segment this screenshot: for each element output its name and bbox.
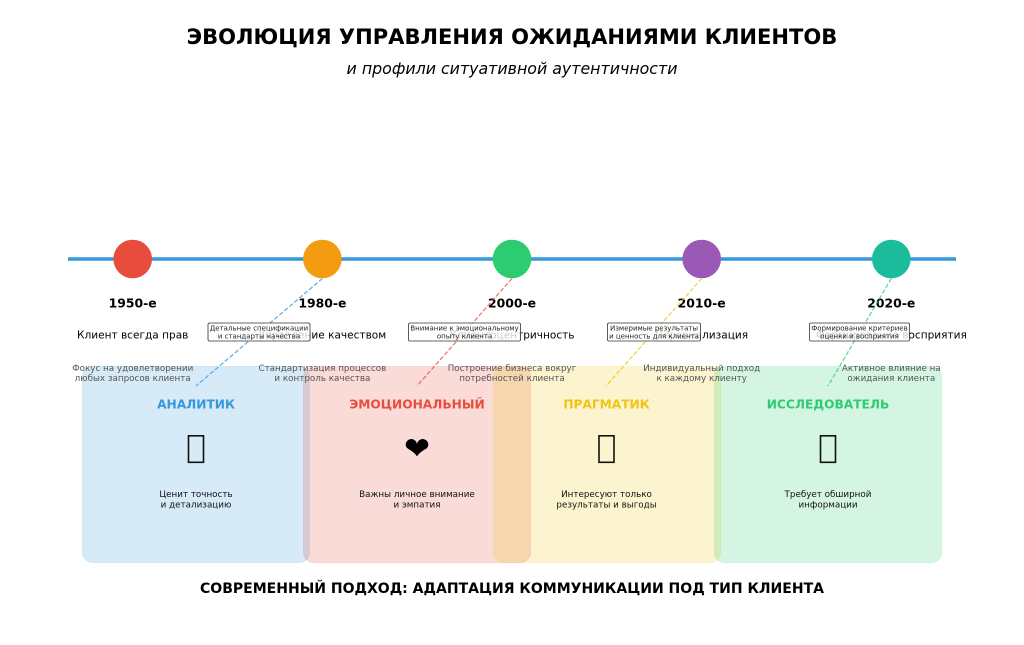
- era 2000: [448, 295, 577, 384]
- marker 1980: [303, 240, 342, 278]
- era 1950: Клиент всегда прав: [77, 330, 188, 342]
- era 2000: потребностей клиента: [459, 374, 565, 384]
- card: pragmatic: [494, 366, 720, 562]
- era 2010: к каждому клиенту: [656, 374, 747, 384]
- marker 2020: [872, 240, 911, 278]
- callout: analyst: и стандарты качества: [218, 332, 300, 340]
- icon: heart: ❤: [404, 431, 430, 467]
- icon: missing glyph: [188, 436, 204, 462]
- timeline: [68, 240, 956, 278]
- era 1950: [72, 295, 193, 384]
- callout: emotional: Внимание к эмоциональному: [410, 324, 519, 332]
- era 1950: Фокус на удовлетворении: [72, 364, 193, 374]
- era 1950: любых запросов клиента: [75, 374, 191, 384]
- callout: emotional: [408, 323, 520, 341]
- card: analyst: АНАЛИТИК: [157, 398, 235, 412]
- callout: pragmatic: Измеримые результаты: [610, 324, 698, 332]
- timeline axis: [68, 257, 956, 261]
- era 2010: [643, 295, 760, 384]
- connector: emotional: [417, 278, 512, 386]
- era 2010: 2010-е: [678, 295, 726, 310]
- era 2020: [816, 295, 967, 384]
- callout: researcher: [810, 323, 910, 341]
- card: emotional: [304, 366, 530, 562]
- era 1980: и контроль качества: [274, 374, 370, 384]
- card: emotional: и эмпатия: [393, 500, 441, 510]
- era 2020: Активное влияние на: [842, 364, 941, 374]
- era 2010: Индивидуальный подход: [643, 364, 760, 374]
- footer heading: СОВРЕМЕННЫЙ ПОДХОД: АДАПТАЦИЯ КОММУНИКАЦИИ ПОД ТИП КЛИЕНТА: [200, 579, 824, 597]
- icon: missing glyph: [599, 436, 614, 462]
- icon: missing glyph: [820, 436, 836, 462]
- connector: pragmatic: [606, 278, 702, 386]
- card: researcher: информации: [798, 500, 858, 510]
- era 1980: Управление качеством: [259, 330, 386, 342]
- card: emotional: Важны личное внимание: [359, 490, 475, 500]
- era 1950: 1950-е: [109, 295, 157, 310]
- subtitle: и профили ситуативной аутентичности: [347, 59, 677, 78]
- callout: emotional: опыту клиента: [437, 332, 492, 340]
- era 2010: Персонализация: [655, 330, 748, 342]
- era 2000: Построение бизнеса вокруг: [448, 364, 577, 374]
- card: researcher: ИССЛЕДОВАТЕЛЬ: [767, 398, 889, 412]
- callout: researcher: Формирование критериев: [811, 324, 908, 332]
- era 1980: Стандартизация процессов: [258, 364, 386, 374]
- era 2020: 2020-е: [867, 295, 915, 310]
- card: pragmatic: результаты и выгоды: [556, 500, 657, 510]
- card: analyst: и детализацию: [161, 500, 231, 510]
- callout: analyst: Детальные спецификации: [210, 324, 308, 332]
- title: ЭВОЛЮЦИЯ УПРАВЛЕНИЯ ОЖИДАНИЯМИ КЛИЕНТОВ: [187, 24, 837, 49]
- card: emotional: ЭМОЦИОНАЛЬНЫЙ: [349, 396, 485, 412]
- era 2000: Клиентоцентричность: [449, 330, 575, 342]
- era 1980: 1980-е: [298, 295, 346, 310]
- era 2020: Формирование восприятия: [816, 330, 967, 342]
- card: researcher: Требует обширной: [784, 490, 871, 500]
- callout: pragmatic: [608, 323, 700, 341]
- era 2000: 2000-е: [488, 295, 536, 310]
- callout: pragmatic: и ценность для клиента: [609, 332, 699, 340]
- connector: researcher: [828, 278, 891, 386]
- card: pragmatic: ПРАГМАТИК: [563, 398, 650, 412]
- connector: analyst: [196, 278, 322, 386]
- card: pragmatic: Интересуют только: [561, 490, 652, 500]
- card: analyst: Ценит точность: [159, 490, 233, 500]
- card: researcher: [714, 366, 942, 562]
- marker 2000: [493, 240, 531, 278]
- callout: researcher: оценки и восприятия: [820, 332, 899, 340]
- era 2020: ожидания клиента: [847, 374, 935, 384]
- marker 1950: [113, 240, 152, 278]
- marker 2010: [682, 240, 721, 278]
- callout: analyst: [208, 323, 310, 341]
- era 1980: [258, 295, 386, 384]
- card: analyst: [82, 366, 310, 562]
